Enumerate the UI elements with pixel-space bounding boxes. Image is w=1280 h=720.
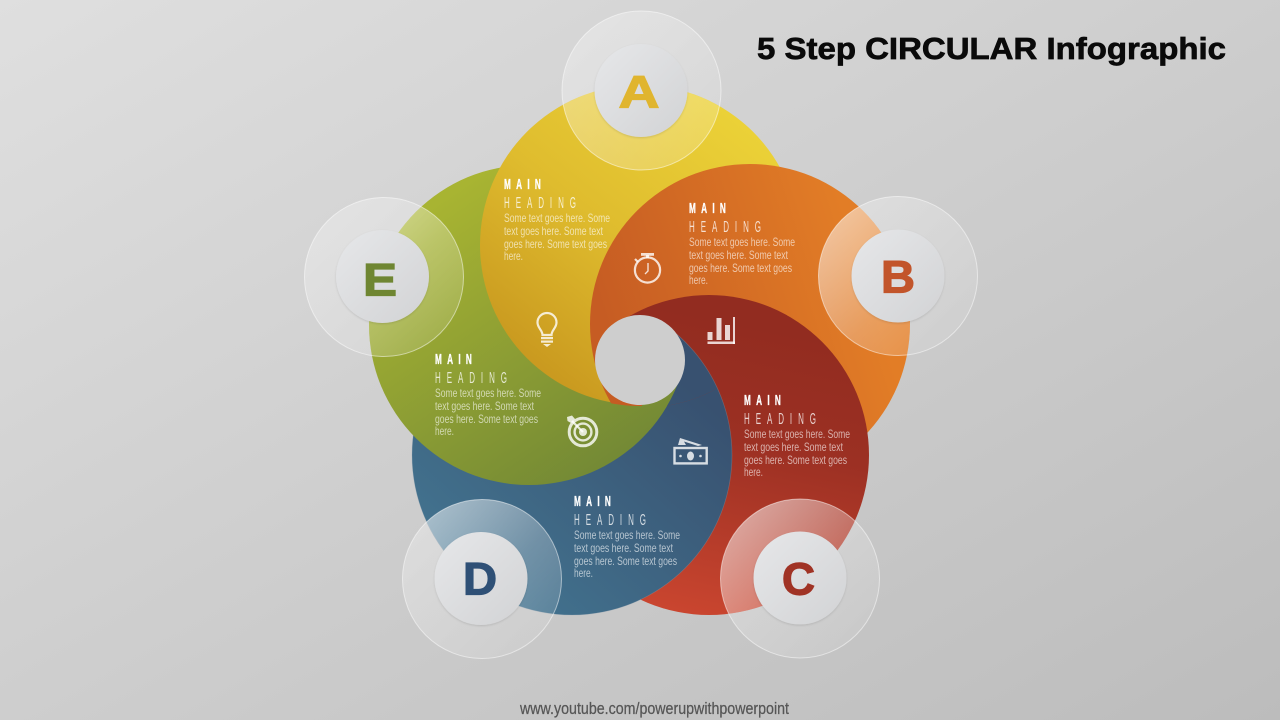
badge: D <box>402 500 562 658</box>
text block: step E <box>435 350 541 438</box>
circle: blue step D <box>412 295 732 615</box>
text block: step E: Some text goes here. Some <box>435 386 541 400</box>
badge: E: E <box>363 254 397 306</box>
text block: step D: here. <box>574 566 593 580</box>
circle: green step E <box>369 165 689 485</box>
text block: step A: here. <box>504 249 523 263</box>
badge: D: D <box>463 554 497 604</box>
text block: step B: here. <box>689 273 708 287</box>
text block: step E: HEADING <box>435 369 507 387</box>
footer url: www.youtube.com/powerupwithpowerpoint <box>519 699 789 718</box>
text block: step C: goes here. Some text goes <box>744 453 847 467</box>
spiral overlap: blue above red <box>667 333 718 406</box>
spiral overlap: red above orange <box>629 295 787 406</box>
icon: target with arrow <box>567 416 597 446</box>
text block: step E: MAIN <box>435 350 472 368</box>
text block: step E: goes here. Some text goes <box>435 412 538 426</box>
circle: orange step B <box>590 164 910 484</box>
badge: C <box>720 499 880 658</box>
text block: step C <box>744 391 850 479</box>
icon: banknotes <box>674 438 707 463</box>
text block: step A: text goes here. Some text <box>504 224 603 238</box>
badge: A: A <box>618 66 660 118</box>
text block: step A: MAIN <box>504 175 541 193</box>
text block: step B: goes here. Some text goes <box>689 261 792 275</box>
text block: step C: MAIN <box>744 391 781 409</box>
text block: step C: HEADING <box>744 410 816 428</box>
text block: step C: text goes here. Some text <box>744 440 843 454</box>
text block: step B: Some text goes here. Some <box>689 235 795 249</box>
text block: step D: Some text goes here. Some <box>574 528 680 542</box>
badge: C: C <box>782 554 815 604</box>
text block: step A: HEADING <box>504 194 576 212</box>
centre hole <box>595 315 685 405</box>
circle: red step C <box>549 295 869 615</box>
badge: E <box>304 198 464 356</box>
text block: step B <box>689 199 795 287</box>
text block: step D <box>574 492 680 580</box>
badge: A <box>562 11 721 170</box>
icon: bar chart <box>708 317 735 344</box>
spiral overlap: orange above yellow <box>590 164 800 406</box>
spiral overlap: green above blue <box>642 385 678 430</box>
badge: B <box>818 196 978 356</box>
text block: step A: Some text goes here. Some <box>504 211 610 225</box>
text block: step E: here. <box>435 424 454 438</box>
text block: step A <box>504 175 610 263</box>
text block: step B: text goes here. Some text <box>689 248 788 262</box>
text block: step E: text goes here. Some text <box>435 399 534 413</box>
text block: step D: MAIN <box>574 492 611 510</box>
circle: yellow step A <box>480 85 800 405</box>
text block: step C: here. <box>744 465 763 479</box>
text block: step A: goes here. Some text goes <box>504 237 607 251</box>
text block: step C: Some text goes here. Some <box>744 427 850 441</box>
badge: B: B <box>881 252 915 302</box>
text block: step B: HEADING <box>689 218 761 236</box>
icon: light bulb <box>538 313 556 347</box>
glass discs over background <box>304 11 978 658</box>
icon: stopwatch <box>635 253 660 283</box>
text block: step D: goes here. Some text goes <box>574 554 677 568</box>
title: 5 Step CIRCULAR Infographic <box>757 31 1226 66</box>
text block: step B: MAIN <box>689 199 726 217</box>
text block: step D: text goes here. Some text <box>574 541 673 555</box>
text block: step D: HEADING <box>574 511 646 529</box>
